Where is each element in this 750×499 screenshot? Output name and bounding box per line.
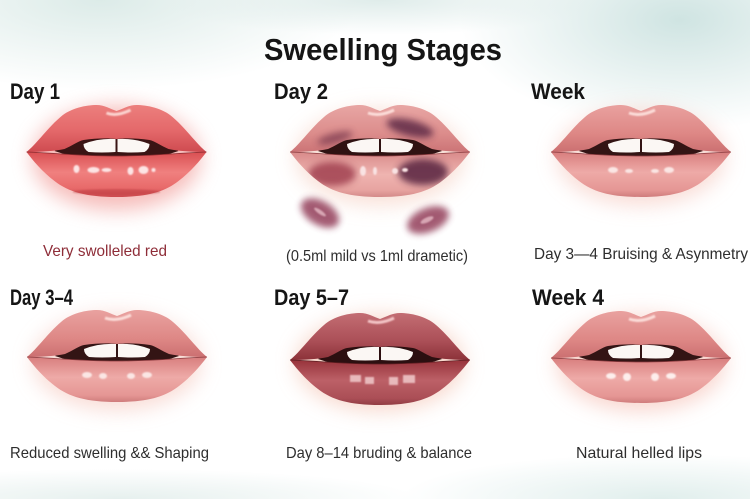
lips: Week — [551, 105, 731, 205]
title: Sweelling Stages — [264, 32, 502, 67]
panel: Day 1 — [10, 79, 206, 260]
panel: Day 2 — [274, 79, 470, 265]
panel: Week 4 — [532, 285, 731, 462]
lips: Day 5-7, darker — [290, 313, 470, 411]
caption: Reduced swelling and Shaping: Reduced swelling && Shaping — [10, 445, 209, 462]
caption: Day 8-14 bruding and balance: Day 8–14 bruding & balance — [286, 445, 472, 462]
heading: Day 3-4: Day 3–4 — [10, 285, 74, 310]
lips: Day 1, very swollen and red — [26, 105, 206, 210]
bruise: lower left — [296, 192, 344, 234]
heading: Week 4: Week 4 — [532, 285, 605, 310]
heading: Day 5-7: Day 5–7 — [274, 285, 349, 310]
panel: Day 5-7 — [274, 285, 472, 462]
lips: Week 4, natural healed — [551, 311, 731, 411]
heading: Day 2: Day 2 — [274, 79, 328, 104]
panel: Day 3-4 — [10, 285, 209, 462]
heading: Day 1: Day 1 — [10, 79, 60, 104]
lips: Day 2, bruised — [290, 105, 470, 205]
heading: Week: Week — [531, 79, 586, 104]
lips: Day 3-4 — [27, 310, 207, 410]
caption: Natural helled lips: Natural helled lips — [576, 445, 702, 462]
panel: Week — [531, 79, 748, 263]
bruise: lower right — [403, 201, 453, 239]
caption: 0.5ml mild vs 1ml drametic: (0.5ml mild vs 1ml drametic) — [286, 248, 468, 265]
caption: Very swolleled red: Very swolleled red — [43, 243, 167, 260]
